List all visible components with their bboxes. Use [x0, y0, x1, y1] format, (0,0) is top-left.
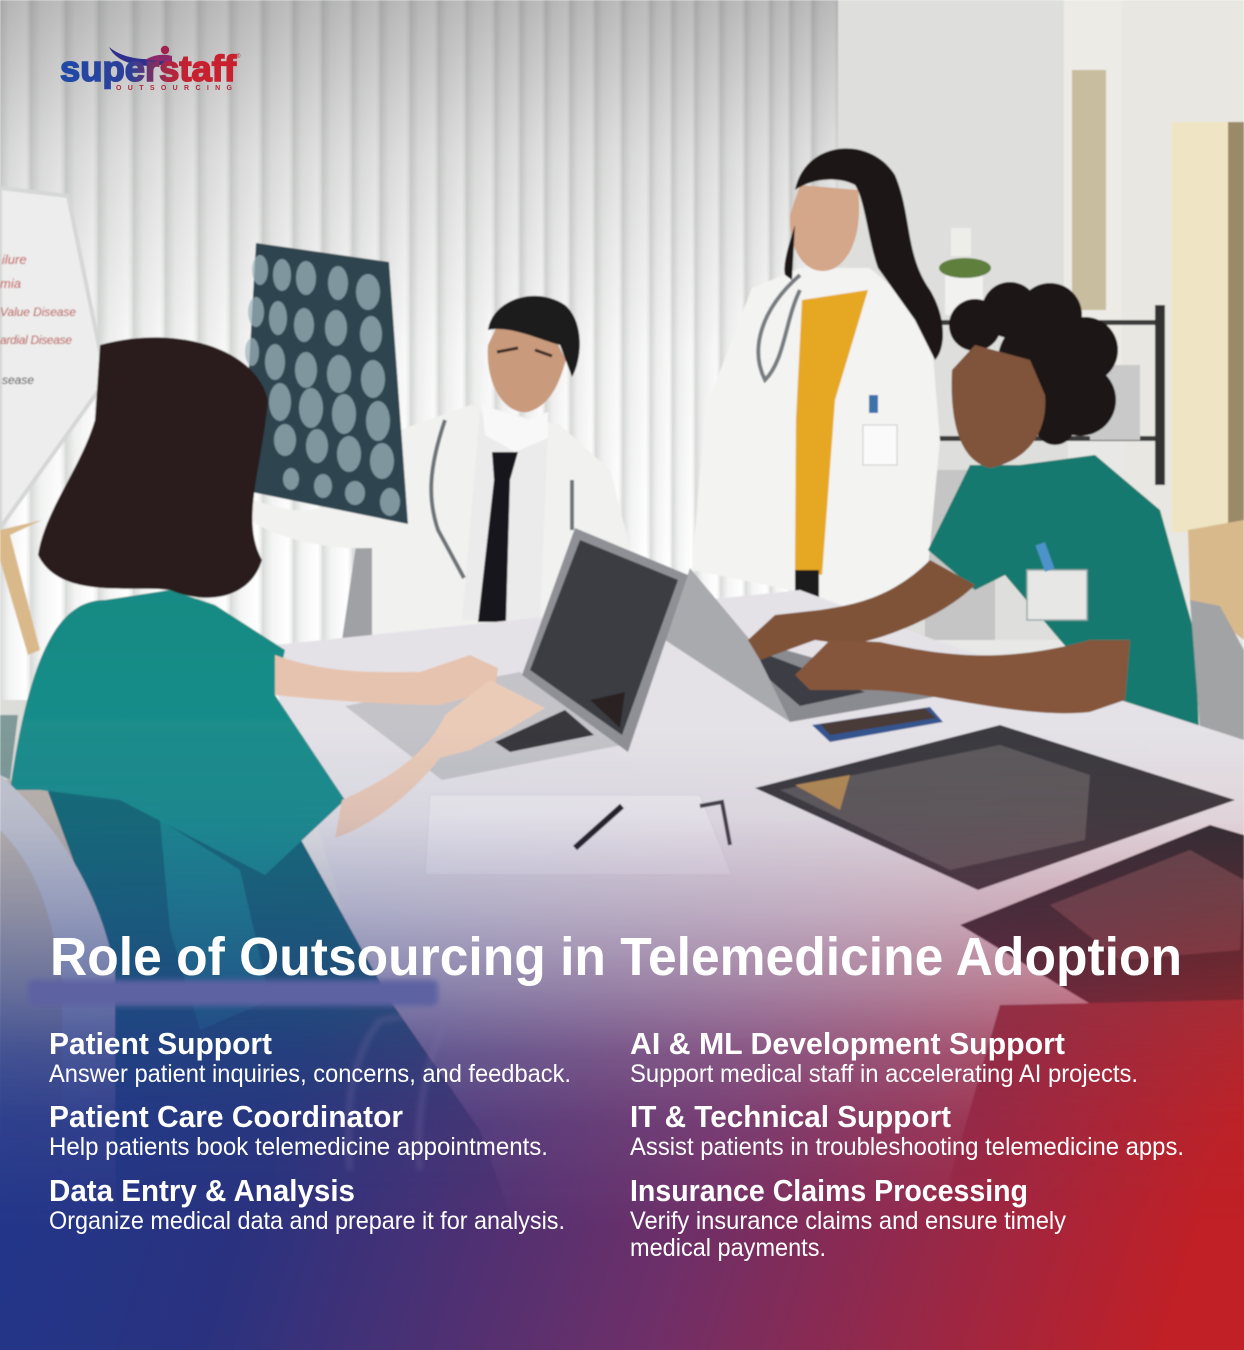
item: IT and Technical Support: Assist patients in troubleshooting telemedicine apps.	[630, 1133, 1184, 1161]
item: AI and ML Development Support: Support medical staff in accelerating AI projects.	[630, 1060, 1138, 1088]
item: Patient Care Coordinator: Help patients book telemedicine appointments.	[49, 1133, 548, 1161]
logo: Superstaff Outsourcing: ®	[236, 53, 241, 60]
nurse arms and hands	[748, 560, 1130, 713]
item: Insurance Claims Processing: Insurance Claims Processing	[630, 1173, 1028, 1208]
item: Insurance Claims Processing: medical payments.	[630, 1234, 826, 1262]
whiteboard	[0, 188, 106, 655]
clipboard and pen	[425, 795, 732, 875]
seated male doctor	[250, 296, 628, 640]
item: Patient Support: Answer patient inquiries, concerns, and feedback.	[49, 1060, 571, 1088]
whiteboard: ardial Disease	[0, 333, 72, 347]
item: IT and Technical Support: IT & Technical Support	[630, 1099, 951, 1134]
item: Patient Support	[49, 1026, 571, 1088]
whiteboard: Value Disease	[0, 305, 76, 319]
title: Role of Outsourcing in Telemedicine Adoption	[50, 927, 1182, 987]
blue red gradient overlay	[0, 730, 1244, 1350]
whiteboard: ilure	[2, 252, 27, 267]
item: Patient Care Coordinator	[49, 1099, 548, 1161]
x-ray film	[242, 243, 408, 524]
seated woman in foreground	[0, 337, 560, 1350]
left laptop	[345, 528, 688, 780]
table tablet reflection	[755, 725, 1244, 1350]
lower chair silhouette under gradient	[28, 980, 450, 1170]
item: Data Entry and Analysis	[49, 1173, 565, 1235]
item: Data Entry and Analysis: Data Entry & Analysis	[49, 1173, 355, 1208]
logo: Superstaff Outsourcing: superstaff	[60, 48, 237, 89]
right chair	[1190, 600, 1244, 780]
item: Patient Support: Patient Support	[49, 1026, 272, 1061]
right laptop and phone	[665, 568, 945, 742]
item: AI and ML Development Support	[630, 1026, 1138, 1088]
item: AI and ML Development Support: AI & ML Development Support	[630, 1026, 1065, 1061]
seated nurse torso and head	[928, 282, 1200, 755]
logo: Superstaff Outsourcing: OUTSOURCING	[116, 85, 233, 92]
item: Insurance Claims Processing	[630, 1173, 1066, 1262]
whiteboard: mia	[0, 276, 21, 291]
whiteboard: sease	[2, 373, 34, 387]
left chair and floor	[0, 700, 120, 1350]
item: Data Entry and Analysis: Organize medical data and prepare it for analysis.	[49, 1207, 565, 1235]
item: Patient Care Coordinator: Patient Care Coordinator	[49, 1099, 403, 1134]
standing female doctor	[692, 148, 943, 620]
item: IT and Technical Support	[630, 1099, 1184, 1161]
item: Insurance Claims Processing: Verify insurance claims and ensure timely	[630, 1207, 1066, 1235]
table	[275, 590, 1244, 1350]
